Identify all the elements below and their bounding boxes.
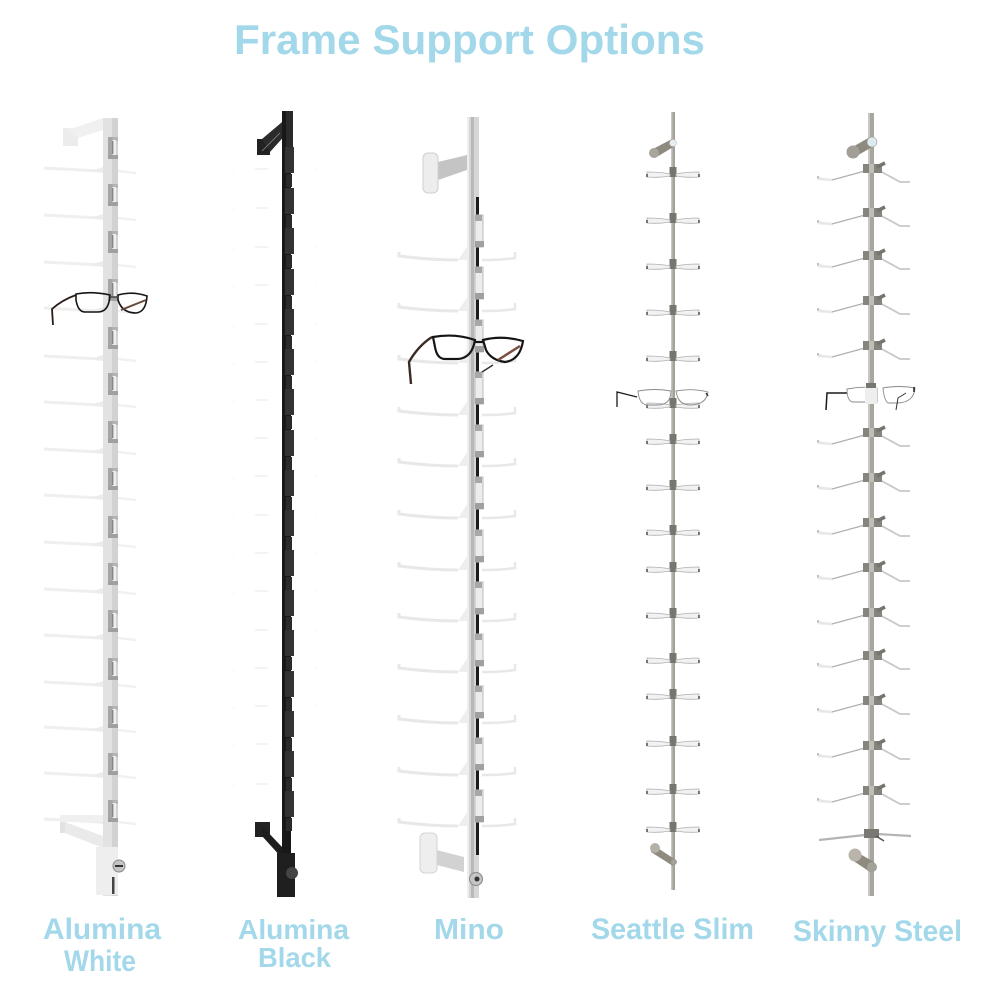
product: Alumina White rail (44, 118, 147, 896)
label: Alumina Black (238, 914, 349, 973)
label: Mino: Mino (434, 914, 504, 946)
wall mount bottom (848, 848, 877, 872)
rail (103, 118, 118, 896)
wall mount top (649, 139, 676, 158)
glasses (52, 293, 147, 325)
shelf arms (399, 245, 515, 826)
label: Alumina Black: Alumina (238, 914, 349, 945)
wall bracket top (257, 117, 288, 155)
wall bracket bottom (420, 833, 464, 873)
shelf arms (44, 167, 136, 824)
wall bracket top (63, 118, 105, 146)
shelves (647, 167, 699, 832)
product: Mino rail (399, 117, 523, 898)
title: Frame Support Options (234, 16, 705, 63)
shelves (818, 163, 910, 804)
rail teeth (285, 147, 294, 831)
wall mount top (846, 137, 877, 158)
rod (868, 113, 874, 896)
product: Skinny Steel rail (818, 113, 915, 896)
faint shelf arms (233, 169, 317, 786)
label: Alumina White: Alumina (43, 913, 161, 946)
rail (467, 117, 479, 898)
lock (470, 872, 482, 886)
product: Seattle Slim rail (617, 112, 708, 890)
glasses (826, 383, 915, 410)
rod (671, 112, 675, 890)
wall bracket top (423, 153, 467, 193)
rail slots (108, 137, 118, 822)
label: Seattle Slim: Seattle Slim (591, 913, 754, 946)
lock block (277, 853, 298, 897)
product: Alumina Black rail (233, 111, 317, 897)
black channel (476, 197, 479, 855)
glasses (409, 336, 523, 384)
rail (282, 111, 291, 897)
label: Skinny Steel: Skinny Steel (793, 915, 962, 948)
wall mount bottom (650, 843, 677, 866)
label: Alumina White (43, 913, 161, 978)
label: Alumina White: White (64, 945, 136, 978)
rail clips (475, 215, 484, 822)
wall bracket bottom (255, 822, 282, 858)
lock block (96, 847, 125, 895)
bottom shelf (819, 829, 911, 841)
glasses (617, 390, 708, 407)
wall bracket bottom (60, 815, 103, 848)
top cap (286, 111, 293, 147)
label: Alumina Black: Black (258, 942, 331, 973)
